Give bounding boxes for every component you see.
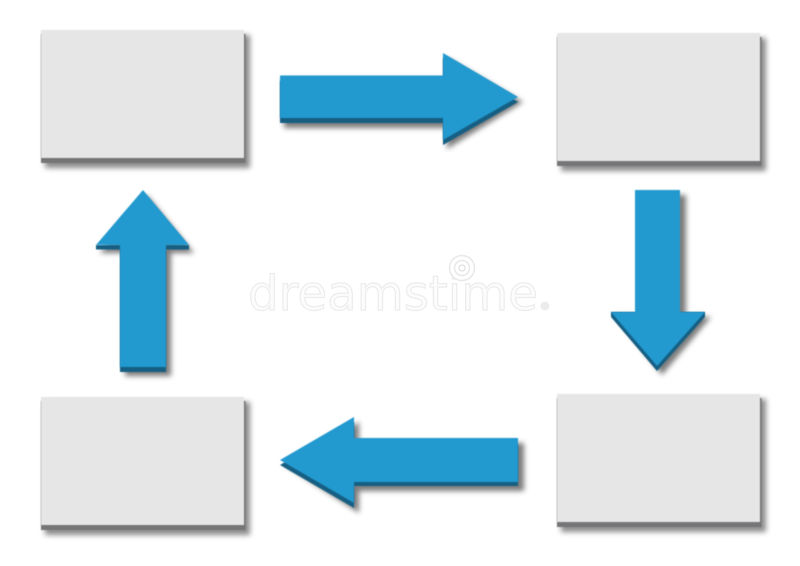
box: bottom right: [557, 394, 766, 532]
box: bottom left: [41, 397, 250, 535]
watermark: dreamstime: dreamstime: [248, 266, 538, 322]
arrow: up: [96, 190, 194, 376]
arrow: down: [611, 190, 711, 375]
arrow: right: [280, 53, 523, 149]
box: top right: [557, 33, 766, 171]
box: top left: [41, 30, 250, 168]
arrow: left: [280, 417, 524, 513]
